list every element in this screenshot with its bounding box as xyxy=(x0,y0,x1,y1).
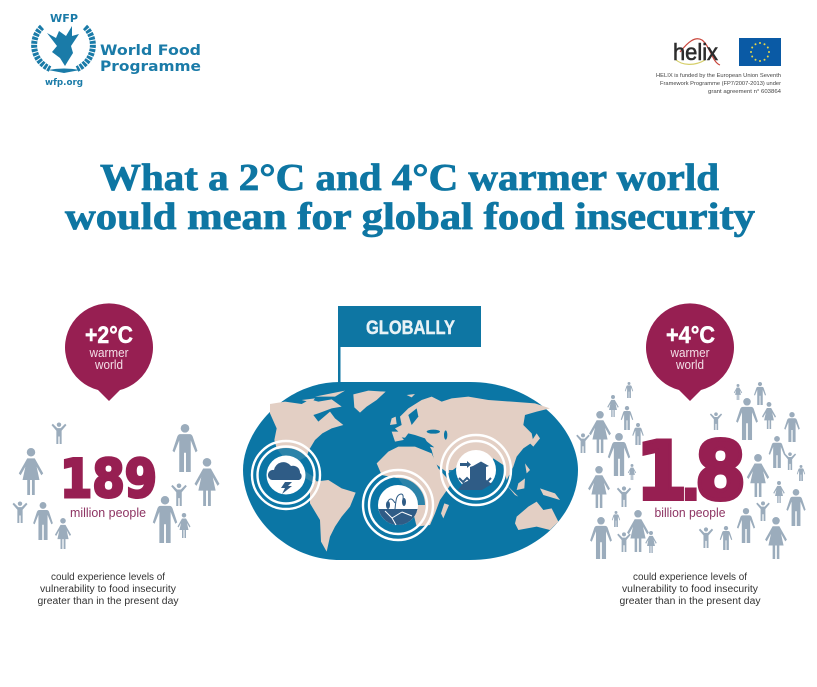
title: would mean for global food insecurity xyxy=(65,196,755,238)
flag: GLOBALLY xyxy=(338,306,481,384)
people: left group xyxy=(13,422,219,549)
stat: 1.8 billion people xyxy=(636,426,746,520)
caption: left: vulnerability to food insecurity xyxy=(40,584,176,595)
stat: 1.8 billion people: billion people xyxy=(654,505,726,520)
caption: right xyxy=(620,572,760,607)
funding note: Framework Programme (FP7/2007-2013) under xyxy=(660,81,781,87)
stat: 189 million people: 189 xyxy=(60,449,157,510)
title: What a 2°C and 4°C warmer world xyxy=(100,157,719,199)
caption: left: could experience levels of xyxy=(51,572,165,583)
badge: +2°C warmer world xyxy=(65,303,153,401)
world map xyxy=(243,382,578,560)
stat: 1.8 billion people: 8 xyxy=(695,426,746,519)
flag: GLOBALLY: GLOBALLY xyxy=(366,318,455,339)
logo: World Food Programme: Programme xyxy=(100,59,201,75)
people: right group xyxy=(576,382,806,559)
badge: +4°C warmer world: warmer xyxy=(670,346,710,360)
funding note xyxy=(656,73,781,95)
caption: left xyxy=(38,572,179,607)
logo: World Food Programme: WFP xyxy=(50,12,78,25)
stat: 1.8 billion people: 1 xyxy=(636,426,687,519)
logo: World Food Programme: World Food xyxy=(100,43,201,59)
stat: 1.8 billion people: . xyxy=(682,453,699,511)
icon: storm cloud xyxy=(252,441,320,509)
badge: +4°C warmer world: world xyxy=(675,358,704,372)
logo: helix: helix xyxy=(673,39,718,65)
logo: EU flag xyxy=(739,38,781,66)
badge: +4°C warmer world xyxy=(646,303,734,401)
stat: 189 million people: million people xyxy=(70,505,146,520)
caption: right: vulnerability to food insecurity xyxy=(622,584,758,595)
badge: +2°C warmer world: warmer xyxy=(89,346,128,360)
logo: World Food Programme: wfp.org xyxy=(45,78,83,88)
caption: right: could experience levels of xyxy=(633,572,747,583)
caption: right: greater than in the present day xyxy=(620,596,760,607)
funding note: grant agreement n° 603864 xyxy=(708,89,781,95)
badge: +2°C warmer world: world xyxy=(94,358,123,372)
caption: left: greater than in the present day xyxy=(38,596,179,607)
icon: drought plant xyxy=(363,470,433,540)
badge: +4°C warmer world: +4°C xyxy=(666,322,715,349)
badge: +2°C warmer world: +2°C xyxy=(85,322,133,349)
logo: World Food Programme xyxy=(34,12,201,88)
icon: flooded house xyxy=(441,435,511,505)
title xyxy=(65,157,755,238)
funding note: HELIX is funded by the European Union Seventh xyxy=(656,73,781,79)
